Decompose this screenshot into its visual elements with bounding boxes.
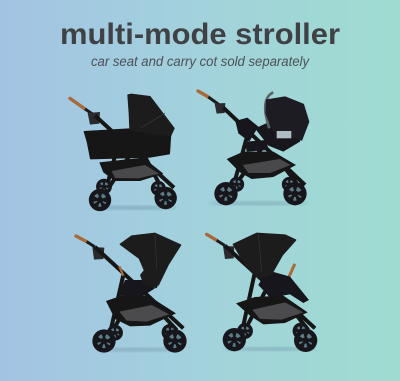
frame xyxy=(95,116,174,193)
stroller: car seat mode xyxy=(198,91,309,205)
frame xyxy=(223,108,305,187)
basket xyxy=(227,152,296,179)
seat xyxy=(118,280,155,297)
wheels xyxy=(107,325,123,341)
canopy xyxy=(120,233,181,285)
orange bumper grip xyxy=(289,265,294,277)
wheels xyxy=(229,177,244,192)
carry cot body xyxy=(84,129,171,159)
stroller: forward-facing seat mode xyxy=(207,233,317,352)
seat adapter xyxy=(235,118,258,142)
wheels xyxy=(96,179,112,195)
seat xyxy=(258,270,309,303)
car seat canopy xyxy=(266,97,309,140)
car seat label xyxy=(277,131,291,138)
handle xyxy=(207,234,217,240)
wheels xyxy=(237,323,253,339)
orange grip xyxy=(119,266,123,276)
basket xyxy=(236,296,308,324)
car seat shell xyxy=(255,122,302,152)
basket xyxy=(99,158,163,181)
carry cot hood xyxy=(128,94,174,136)
title: multi-mode stroller xyxy=(60,18,340,51)
frame xyxy=(95,247,183,333)
basket xyxy=(106,296,176,326)
canopy xyxy=(233,233,296,278)
subtitle: car seat and carry cot sold separately xyxy=(91,54,310,69)
cup holder xyxy=(92,247,104,260)
frame xyxy=(225,246,315,333)
cup holder xyxy=(223,246,234,259)
car seat handle xyxy=(265,92,273,128)
handle xyxy=(70,98,85,109)
stroller: parent-facing seat mode xyxy=(76,233,187,353)
handle xyxy=(198,91,208,97)
cup holder xyxy=(215,103,225,114)
stroller: carry cot mode xyxy=(70,94,177,211)
handle xyxy=(76,236,87,242)
cup holder xyxy=(88,112,100,125)
